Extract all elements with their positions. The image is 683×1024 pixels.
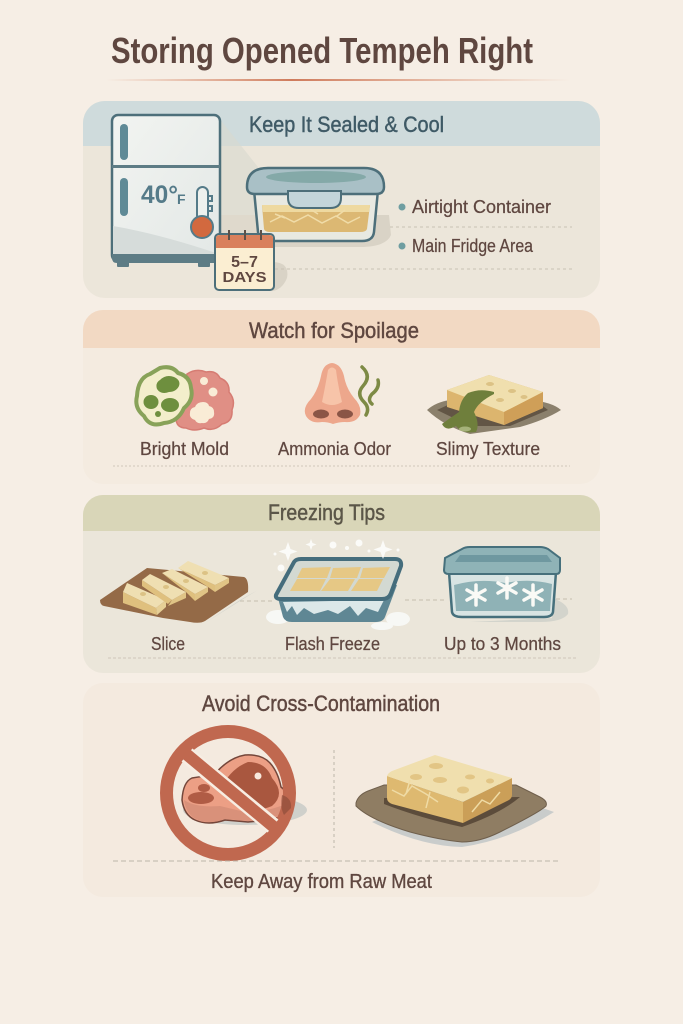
heading: avoid cross-contamination: Avoid Cross-Contamination	[202, 691, 440, 716]
icon: tempeh on plate	[356, 755, 554, 847]
panel: keep it sealed and cool	[83, 101, 600, 298]
icon: sliced tempeh on board	[100, 561, 258, 623]
panel: watch for spoilage	[83, 310, 600, 466]
icon: 5-7 days calendar: DAYS	[222, 269, 266, 286]
icon: frozen container with snowflakes	[444, 547, 568, 622]
heading: freezing tips: Freezing Tips	[268, 500, 385, 525]
icon: 5-7 days calendar	[215, 230, 287, 291]
label: up to 3 months: Up to 3 Months	[444, 634, 561, 654]
icon: fridge at 40F: F	[177, 191, 186, 207]
icon: flash freeze tray	[266, 539, 410, 630]
label: bright mold: Bright Mold	[140, 439, 229, 459]
label: slice: Slice	[151, 634, 185, 654]
icon: nose with odor	[305, 363, 378, 424]
heading: watch for spoilage: Watch for Spoilage	[249, 318, 419, 343]
bullet: airtight container: Airtight Container	[412, 197, 551, 217]
label: flash freeze: Flash Freeze	[285, 634, 380, 654]
label: keep away from raw meat: Keep Away from Raw Meat	[211, 871, 432, 893]
icon: slimy tempeh	[427, 375, 561, 434]
title: Storing Opened Tempeh Right	[111, 30, 533, 71]
icon: fridge at 40F: 40°	[141, 181, 178, 209]
label: ammonia odor: Ammonia Odor	[278, 439, 391, 459]
icon: fridge at 40F	[112, 115, 220, 267]
panel: freezing tips	[83, 495, 600, 673]
label: slimy texture: Slimy Texture	[436, 439, 540, 459]
icon: bright mold	[136, 367, 233, 430]
icon: raw meat prohibited	[166, 732, 307, 854]
heading: keep it sealed: Keep It Sealed & Cool	[249, 112, 444, 137]
panel: avoid cross-contamination	[83, 683, 600, 897]
icon: 5-7 days calendar: 5–7	[231, 254, 258, 271]
bullet: main fridge area: Main Fridge Area	[412, 236, 534, 256]
icon: airtight glass container	[247, 168, 391, 247]
